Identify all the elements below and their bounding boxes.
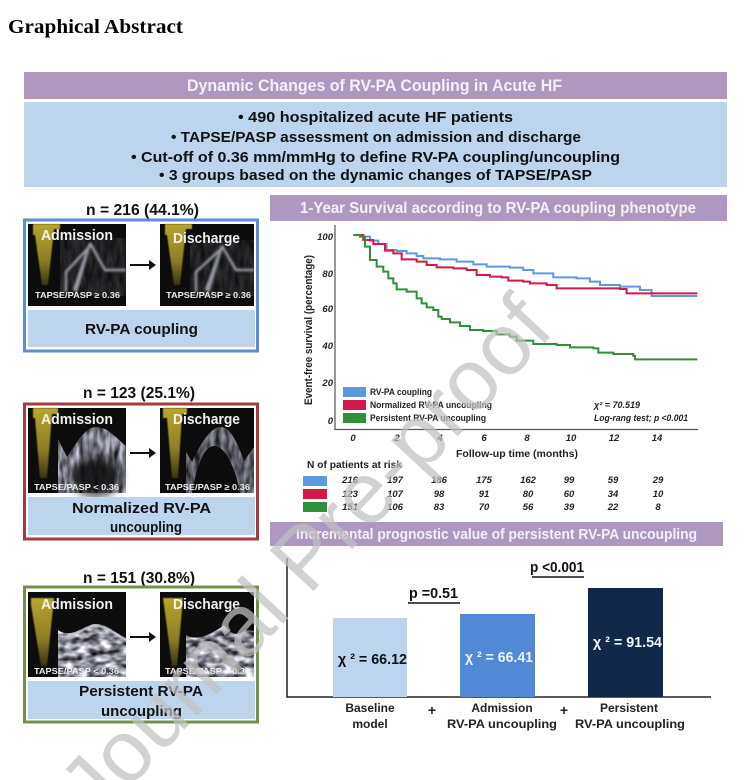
table: patients at risk: 175: [476, 475, 493, 486]
panel: persistent RV-PA uncoupling: Persistent RV-PA: [79, 683, 203, 700]
bar labels: +: [560, 702, 568, 718]
y axis ticks: 100: [317, 232, 334, 243]
bar: persistent uncoupling: [588, 588, 663, 697]
statistics annotation: [593, 400, 688, 423]
bar labels: model: [352, 717, 388, 731]
x axis ticks: 0: [350, 433, 356, 444]
table: patients at risk: 22: [607, 502, 619, 513]
panel: normalized RV-PA uncoupling: n = 123 (25.1%): [83, 385, 195, 402]
panel: persistent RV-PA uncoupling: Discharge: [173, 596, 240, 613]
table: patients at risk: 10: [653, 489, 664, 500]
table: patients at risk: 151: [342, 502, 358, 513]
bar chart: incremental prognostic value: [287, 558, 711, 731]
bar labels: RV-PA uncoupling: [575, 717, 685, 731]
x axis ticks: 12: [609, 433, 620, 444]
table: patients at risk: 197: [387, 475, 404, 486]
bar: baseline model: [333, 618, 407, 697]
y axis ticks: 80: [322, 269, 334, 280]
panel: persistent RV-PA uncoupling: n = 151 (30.8%): [83, 570, 195, 587]
table: patients at risk: 83: [434, 502, 445, 513]
panel: study summary: [24, 102, 727, 187]
bar labels: Baseline: [345, 701, 395, 715]
table: patients at risk: 107: [387, 489, 404, 500]
table: patients at risk: 162: [520, 475, 537, 486]
x axis ticks: 14: [652, 433, 663, 444]
panel: normalized RV-PA uncoupling: [24, 385, 258, 539]
panel: normalized RV-PA uncoupling: uncoupling: [110, 519, 182, 536]
chart: Kaplan-Meier survival: [303, 225, 698, 460]
panel: RV-PA coupling: TAPSE/PASP ≥ 0.36: [166, 290, 251, 300]
header bar: incremental value: [270, 522, 723, 546]
panel: study summary: • TAPSE/PASP assessment on admission and discharge: [171, 129, 581, 146]
panel: RV-PA coupling: Discharge: [173, 230, 240, 247]
header bar: main title: Dynamic Changes of RV-PA Coupling in Acute HF: [187, 76, 562, 95]
table: patients at risk: 106: [387, 502, 404, 513]
table: patients at risk: 70: [479, 502, 490, 513]
y axis ticks: 60: [322, 304, 334, 315]
x axis label: Follow-up time (months): [456, 449, 578, 460]
panel: RV-PA coupling: Admission: [41, 227, 113, 244]
panel: persistent RV-PA uncoupling: Admission: [41, 596, 113, 613]
bar labels: [345, 701, 685, 731]
table: patients at risk: 80: [523, 489, 534, 500]
legend: Normalized RV-PA uncoupling: [370, 400, 492, 410]
table: patients at risk: 29: [652, 475, 664, 486]
statistics annotation: χ² = 70.519: [593, 400, 640, 410]
y axis ticks: 0: [328, 416, 334, 427]
table: patients at risk: 99: [564, 475, 575, 486]
header bar: main title: [24, 72, 727, 99]
panel: normalized RV-PA uncoupling: Normalized RV-PA: [72, 500, 211, 517]
panel: normalized RV-PA uncoupling: Discharge: [173, 411, 240, 428]
panel: RV-PA coupling: RV-PA coupling: [85, 321, 198, 338]
x axis ticks: 8: [524, 433, 530, 444]
table: patients at risk: 8: [655, 502, 661, 513]
header bar: survival: [270, 195, 727, 221]
bar labels: RV-PA uncoupling: [447, 717, 557, 731]
x axis ticks: 2: [393, 433, 400, 444]
bar: persistent uncoupling: χ ² = 91.54: [593, 634, 663, 651]
bar: admission uncoupling: [460, 614, 535, 697]
table: patients at risk: 98: [434, 489, 445, 500]
x axis ticks: 6: [481, 433, 487, 444]
legend: [343, 387, 492, 423]
table: patients at risk: 91: [479, 489, 489, 500]
table: patients at risk: 56: [523, 502, 534, 513]
title: Graphical Abstract: [8, 17, 184, 38]
header bar: incremental value: Incremental prognostic value of persistent RV-PA uncoupling: [296, 526, 697, 543]
bar: baseline model: χ ² = 66.12: [338, 651, 407, 668]
legend: Persistent RV-PA uncoupling: [370, 413, 486, 423]
panel: persistent RV-PA uncoupling: [24, 570, 258, 722]
x axis ticks: [350, 433, 663, 444]
x axis ticks: 4: [436, 433, 443, 444]
panel: study summary: • 490 hospitalized acute HF patients: [238, 109, 513, 126]
table: patients at risk: 34: [608, 489, 619, 500]
bar labels: Admission: [471, 701, 533, 715]
table: patients at risk: 59: [608, 475, 619, 486]
table: patients at risk: 39: [564, 502, 575, 513]
panel: RV-PA coupling: [24, 202, 258, 351]
panel: study summary: • 3 groups based on the dynamic changes of TAPSE/PASP: [159, 167, 592, 184]
panel: persistent RV-PA uncoupling: uncoupling: [101, 703, 182, 720]
panel: normalized RV-PA uncoupling: TAPSE/PASP ≥ 0.36: [165, 482, 250, 492]
header bar: survival: 1-Year Survival according to RV-PA coupling phenotype: [300, 200, 696, 217]
y axis label: Event-free survival (percentage): [303, 255, 315, 405]
table: patients at risk: 60: [564, 489, 575, 500]
p value: 0.51: p =0.51: [409, 586, 458, 602]
panel: normalized RV-PA uncoupling: TAPSE/PASP < 0.36: [34, 482, 119, 492]
table: patients at risk: 216: [341, 475, 359, 486]
survival curves: [353, 235, 697, 359]
panel: RV-PA coupling: TAPSE/PASP ≥ 0.36: [35, 290, 120, 300]
panel: normalized RV-PA uncoupling: Admission: [41, 411, 113, 428]
table: patients at risk: [303, 460, 664, 513]
legend: RV-PA coupling: [370, 387, 432, 397]
y axis ticks: [317, 232, 334, 427]
y axis ticks: 40: [321, 341, 334, 352]
panel: study summary: • Cut-off of 0.36 mm/mmHg to define RV-PA coupling/uncoupling: [131, 149, 620, 166]
panel: persistent RV-PA uncoupling: TAPSE/PASP < 0.36: [34, 666, 119, 676]
p value: 0.001: p <0.001: [530, 560, 584, 576]
panel: persistent RV-PA uncoupling: TAPSE/PASP < 0.36: [165, 666, 250, 676]
table: patients at risk: 186: [431, 475, 448, 486]
bar labels: +: [428, 702, 436, 718]
statistics annotation: Log-rang test; p <0.001: [594, 413, 688, 423]
bar labels: Persistent: [600, 701, 658, 715]
x axis ticks: 10: [566, 433, 577, 444]
table: patients at risk: N of patients at risk: [307, 460, 402, 471]
y axis ticks: 20: [321, 378, 334, 389]
panel: RV-PA coupling: n = 216 (44.1%): [86, 202, 199, 219]
bar: admission uncoupling: χ ² = 66.41: [465, 649, 533, 666]
table: patients at risk: 123: [342, 489, 359, 500]
